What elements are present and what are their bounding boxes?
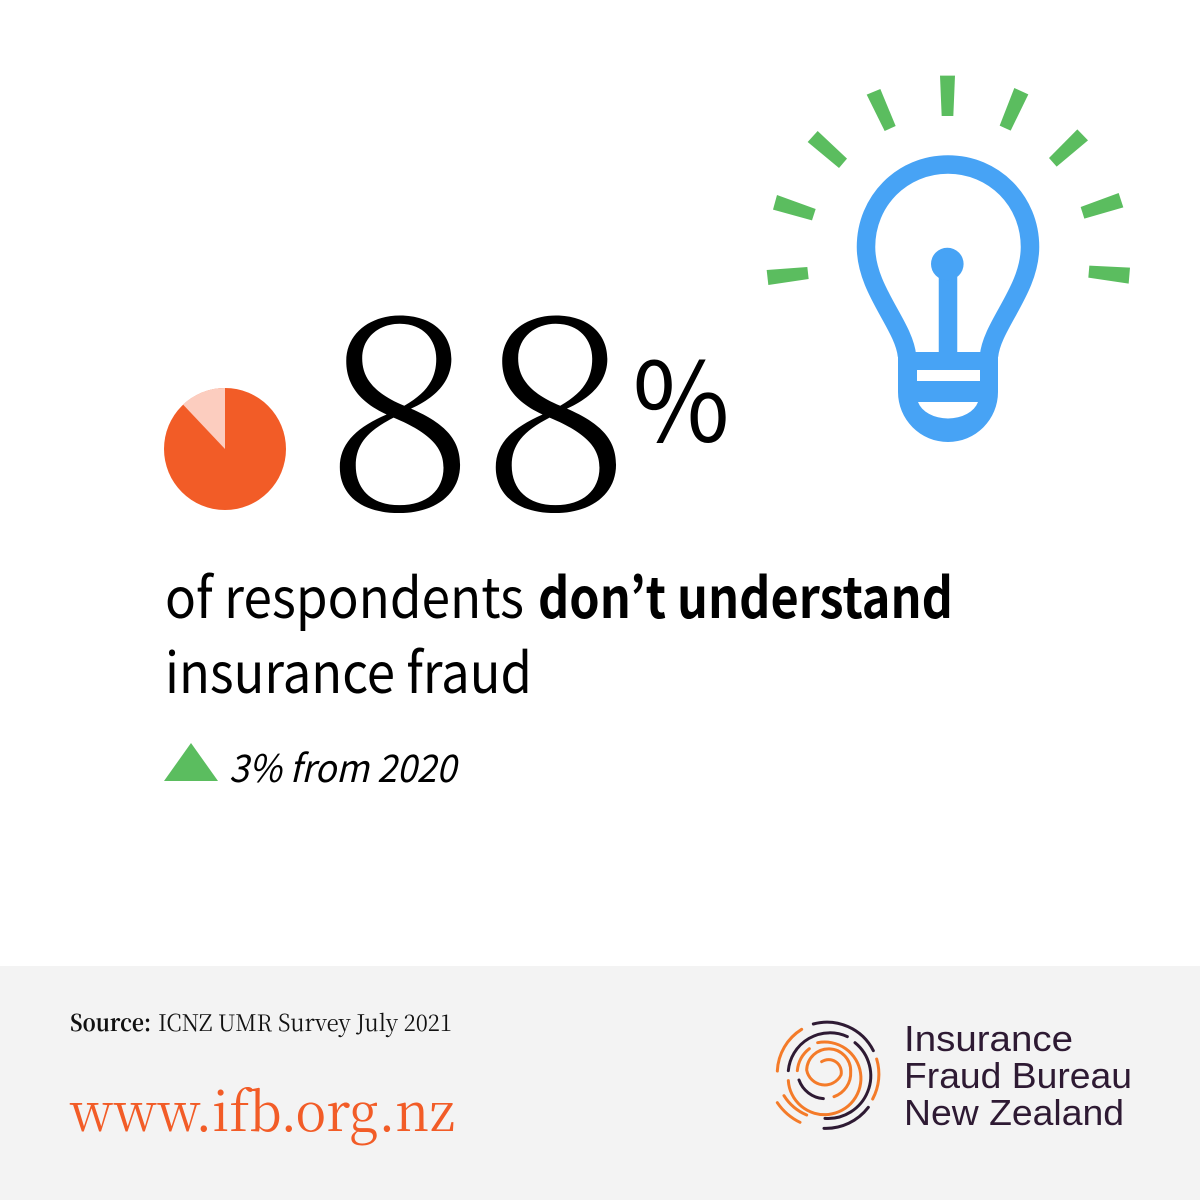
big number: 88%: %: [632, 315, 730, 474]
bulb base: [898, 352, 998, 442]
statement text: insurance fraud: [165, 629, 532, 710]
bulb glass and filament: [866, 164, 1030, 356]
big number: 88%: 88: [324, 207, 632, 585]
logo: wordmark: [904, 1018, 1132, 1133]
logo: spiral mark: [777, 1022, 879, 1128]
source line: Source:: [70, 1005, 151, 1038]
statement text: [165, 554, 953, 710]
pie chart: 88 percent: [164, 388, 286, 510]
source line: ICNZ UMR Survey July 2021: [158, 1005, 452, 1038]
statement text: don’t understand: [538, 554, 953, 635]
website url: www.ifb.org.nz: [69, 1070, 455, 1147]
change from 2020: 3% from 2020: [229, 738, 460, 793]
footer panel background: [0, 966, 1200, 1200]
icon: light bulb with rays: [767, 76, 1130, 442]
statement text: of respondents: [165, 554, 524, 635]
icon: green up triangle: [164, 743, 218, 781]
logo: wordmark: Fraud Bureau: [904, 1055, 1132, 1096]
logo: wordmark: New Zealand: [904, 1092, 1124, 1133]
logo: wordmark: Insurance: [904, 1018, 1073, 1059]
light rays: [767, 76, 1130, 285]
